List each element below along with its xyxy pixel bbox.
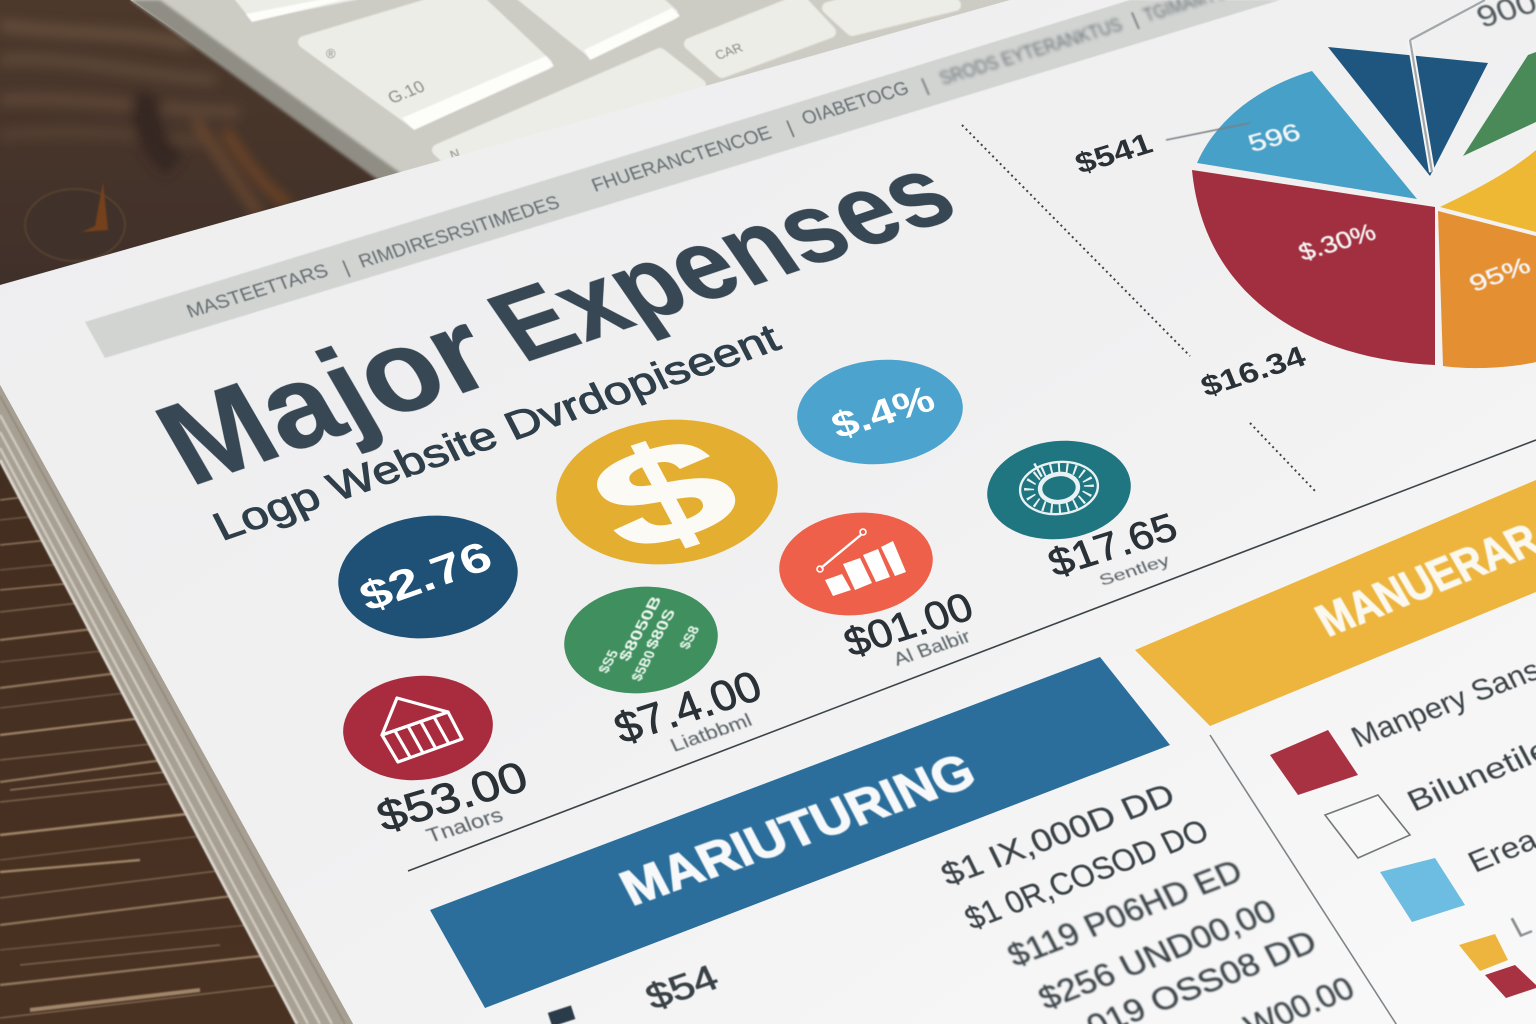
title: Expenses [468,135,976,382]
blurred upper grain [0,25,290,215]
amount table: $1 0R,COSOD DO [959,812,1214,936]
amount: $01.00 [838,585,979,665]
strip labels: | [919,76,932,97]
amount table [548,776,1360,1024]
section divider line [408,440,1536,871]
caption: Tnalors [423,805,507,848]
blue banner: MARIUTURING [611,743,984,916]
icon: gear dial [1017,457,1101,518]
icon: glyph text: $80S [643,607,679,651]
legend labels: Erea [1463,824,1536,879]
icon: glyph text: $S5 [595,648,622,675]
amount table: $1 IX,000D DD [935,776,1180,892]
amount table: $54 [639,957,724,1017]
yellow banner [1135,480,1536,726]
caption: Liatbbml [667,710,755,756]
icon: glyph text: $8050B [616,594,666,663]
key labels [326,40,745,163]
stat: blue percent circle [793,353,967,471]
pie percentages: 95% [1465,252,1534,297]
pie slice: light blue [1197,71,1417,199]
amount: $53.00 [371,753,534,841]
page stack edge [0,385,353,1024]
key labels: G.10 [384,77,428,107]
stat: navy circle: $2.76 [352,532,499,620]
pie chart: $16.34 [1197,341,1310,403]
pie percentages: $.30% [1295,219,1380,267]
icon: glyph text: $5B0 [628,648,659,683]
key highlights [246,0,680,130]
top navigation strip [85,0,1280,358]
pie slice: orange [1438,211,1536,368]
blue banner [430,657,1170,1008]
icon: bars and trend line [817,529,906,596]
pie chart [1071,0,1536,403]
legend labels: L [1506,909,1536,944]
strip labels: | [1129,10,1142,31]
stat: green circle [559,579,768,756]
legend labels [1346,654,1536,944]
stat: gold dollar circle: $ [567,405,762,583]
stat: navy circle [332,507,524,647]
strip labels: FHUERANCTENCOE [589,123,775,197]
strip labels [184,0,1242,323]
stat: gold dollar circle [550,405,784,583]
pie slice: green [1463,52,1536,156]
amount: $17.65 [1043,506,1183,585]
legend swatch: yellow and red [1459,934,1536,998]
callout leader [1410,0,1485,172]
caption: Al Balbir [890,626,974,670]
fine lower grain [0,495,280,1018]
pie percentages: 596 [1244,119,1304,158]
pie percentages [1244,119,1534,297]
strip labels: SRODS EYTERANKTUS [937,15,1126,90]
legend swatch: red [1270,730,1358,795]
stat: coral chart circle [774,505,979,670]
strip labels: OIABETOCG [799,78,912,130]
icon: glyph text [595,594,703,683]
legend swatch: white [1325,795,1410,858]
legend labels: Bilunetile [1402,733,1536,818]
pie slice: navy [1328,47,1488,176]
legend labels: Manpery Sans [1346,654,1536,754]
strip labels: | [340,258,353,279]
amount table: $256 UND00,00 [1033,893,1282,1016]
pie outer labels: $541 [1071,128,1157,181]
key labels: CAR [712,40,745,63]
legend swatch: blue [1380,858,1465,922]
title [134,135,976,510]
strip labels: RIMDIRESRSITIMEDES [356,192,563,273]
keyboard keys [238,0,955,180]
pie slice: red [1192,170,1435,365]
icon: glyph text: $S8 [676,624,703,651]
keyboard [130,0,1030,182]
stat: teal gear circle [982,434,1183,590]
subtitle: Logp Website Dvrdopiseent [206,316,787,549]
icon: building [382,698,462,762]
caption: Sentley [1096,551,1172,590]
amount table: $119 P06HD ED [1002,853,1248,973]
amount: $7.4.00 [608,662,768,753]
title: Major [134,284,513,510]
strip labels: MASTEETTARS [184,261,332,323]
dotted divider [962,125,1316,492]
legend panel [1210,654,1536,1024]
key labels: N [448,146,462,163]
key labels: ® [326,46,336,61]
strip labels: | [784,118,797,139]
pie slice: yellow [1440,150,1536,232]
stat: blue percent circle: $.4% [825,377,940,446]
stat: red building [339,670,534,848]
